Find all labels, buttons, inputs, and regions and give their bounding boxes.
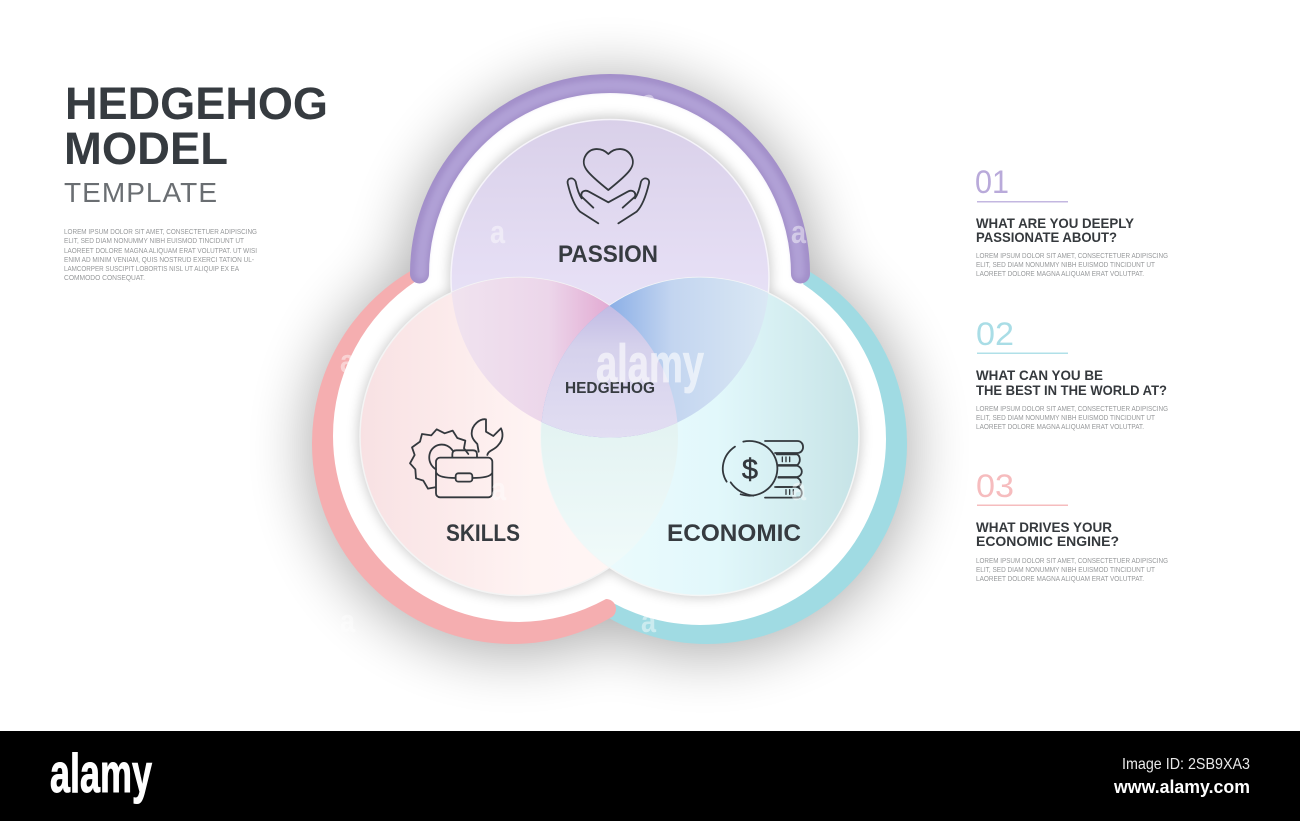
- item 02: [976, 316, 1168, 431]
- heading 03: ECONOMIC ENGINE?: [976, 533, 1119, 549]
- watermark letters: a: [490, 214, 505, 250]
- heading 02: THE BEST IN THE WORLD AT?: [976, 382, 1167, 398]
- overlap: passion and economic: [542, 278, 768, 438]
- venn diagram: [308, 76, 911, 654]
- overlap: skills and economic: [541, 422, 678, 518]
- soft outer shadow: [308, 76, 911, 654]
- heading 03: [976, 519, 1119, 549]
- label: economic: ECONOMIC: [667, 520, 801, 547]
- intro paragraph: LOREM IPSUM DOLOR SIT AMET, CONSECTETUER ADIPISCING: [64, 229, 257, 236]
- body 01: ELIT, SED DIAM NONUMMY NIBH EUISMOD TINCIDUNT UT: [976, 262, 1156, 269]
- subtitle: template: TEMPLATE: [64, 177, 217, 208]
- item 03: [976, 468, 1168, 583]
- watermark letters: a: [340, 343, 355, 379]
- watermark letters: a: [791, 471, 806, 507]
- watermark letters: [340, 83, 908, 639]
- heading 01: [976, 215, 1135, 245]
- body 03: [976, 558, 1168, 583]
- body 01: [976, 253, 1168, 278]
- pink outer ring: [312, 271, 616, 644]
- body 02: LOREM IPSUM DOLOR SIT AMET, CONSECTETUER ADIPISCING: [976, 406, 1168, 413]
- icon: heart in hands: [568, 149, 649, 223]
- watermark letters: a: [893, 596, 908, 632]
- intro paragraph: ENIM AD MINIM VENIAM, QUIS NOSTRUD EXERCI TATION UL-: [64, 257, 255, 264]
- number 01: 01: [975, 164, 1009, 200]
- image id: Image ID: 2SB9XA3: [1122, 756, 1250, 773]
- intro paragraph: [64, 229, 257, 282]
- heading 02: WHAT CAN YOU BE: [976, 367, 1103, 383]
- overlap: passion and skills: [452, 278, 676, 438]
- label: skills: SKILLS: [446, 520, 520, 547]
- body 01: LAOREET DOLORE MAGNA ALIQUAM ERAT VOLUTPAT.: [976, 271, 1144, 278]
- body 03: LOREM IPSUM DOLOR SIT AMET, CONSECTETUER ADIPISCING: [976, 558, 1168, 565]
- watermark letters: a: [641, 83, 656, 119]
- body 02: LAOREET DOLORE MAGNA ALIQUAM ERAT VOLUTPAT.: [976, 424, 1144, 431]
- intro paragraph: LAMCORPER SUSCIPIT LOBORTIS NISL UT ALIQUIP EX EA: [64, 266, 239, 273]
- intro paragraph: ELIT, SED DIAM NONUMMY NIBH EUISMOD TINCIDUNT UT: [64, 238, 245, 245]
- teal outer ring: [606, 271, 907, 644]
- circle: passion: [451, 120, 769, 438]
- body 01: LOREM IPSUM DOLOR SIT AMET, CONSECTETUER ADIPISCING: [976, 253, 1168, 260]
- label: hedgehog: HEDGEHOG: [565, 380, 655, 397]
- watermark letters: a: [641, 603, 656, 639]
- intro paragraph: LAOREET DOLORE MAGNA ALIQUAM ERAT VOLUTPAT. UT WISI: [64, 248, 257, 255]
- number 03: 03: [976, 468, 1014, 504]
- title: hedgehog model: HEDGEHOG: [65, 78, 328, 129]
- dollar sign: $: [742, 454, 758, 486]
- body 03: LAOREET DOLORE MAGNA ALIQUAM ERAT VOLUTPAT.: [976, 576, 1144, 583]
- label: passion: PASSION: [558, 241, 658, 268]
- heading 02: [976, 367, 1167, 398]
- icon: gear wrench briefcase: [410, 419, 502, 497]
- body 03: ELIT, SED DIAM NONUMMY NIBH EUISMOD TINCIDUNT UT: [976, 567, 1156, 574]
- icon: dollar coins: [723, 441, 803, 498]
- overlap: hedgehog centre: [542, 306, 678, 438]
- inner circle shadow: [358, 116, 861, 598]
- intro paragraph: COMMODO CONSEQUAT.: [64, 275, 145, 282]
- watermark letters: a: [340, 603, 355, 639]
- body 02: [976, 406, 1168, 431]
- heading 01: WHAT ARE YOU DEEPLY: [976, 215, 1135, 231]
- website: www.alamy.com: [1113, 777, 1250, 797]
- watermark: alamy: alamy: [596, 334, 704, 394]
- circle: skills: [360, 278, 678, 596]
- title: hedgehog model: [64, 78, 328, 174]
- number 02: 02: [976, 316, 1014, 352]
- body 02: ELIT, SED DIAM NONUMMY NIBH EUISMOD TINCIDUNT UT: [976, 415, 1156, 422]
- watermark letters: a: [491, 471, 506, 507]
- title block: [64, 78, 328, 282]
- circle: economic: [541, 278, 859, 596]
- white base plate: [331, 91, 888, 626]
- purple outer ring: [420, 83, 800, 274]
- footer bar: [0, 731, 1300, 821]
- footer logo: alamy: [50, 742, 152, 804]
- heading 01: PASSIONATE ABOUT?: [976, 229, 1117, 245]
- heading 03: WHAT DRIVES YOUR: [976, 519, 1112, 535]
- title: hedgehog model: MODEL: [64, 123, 228, 174]
- watermark letters: a: [791, 214, 806, 250]
- item 01: [975, 164, 1168, 278]
